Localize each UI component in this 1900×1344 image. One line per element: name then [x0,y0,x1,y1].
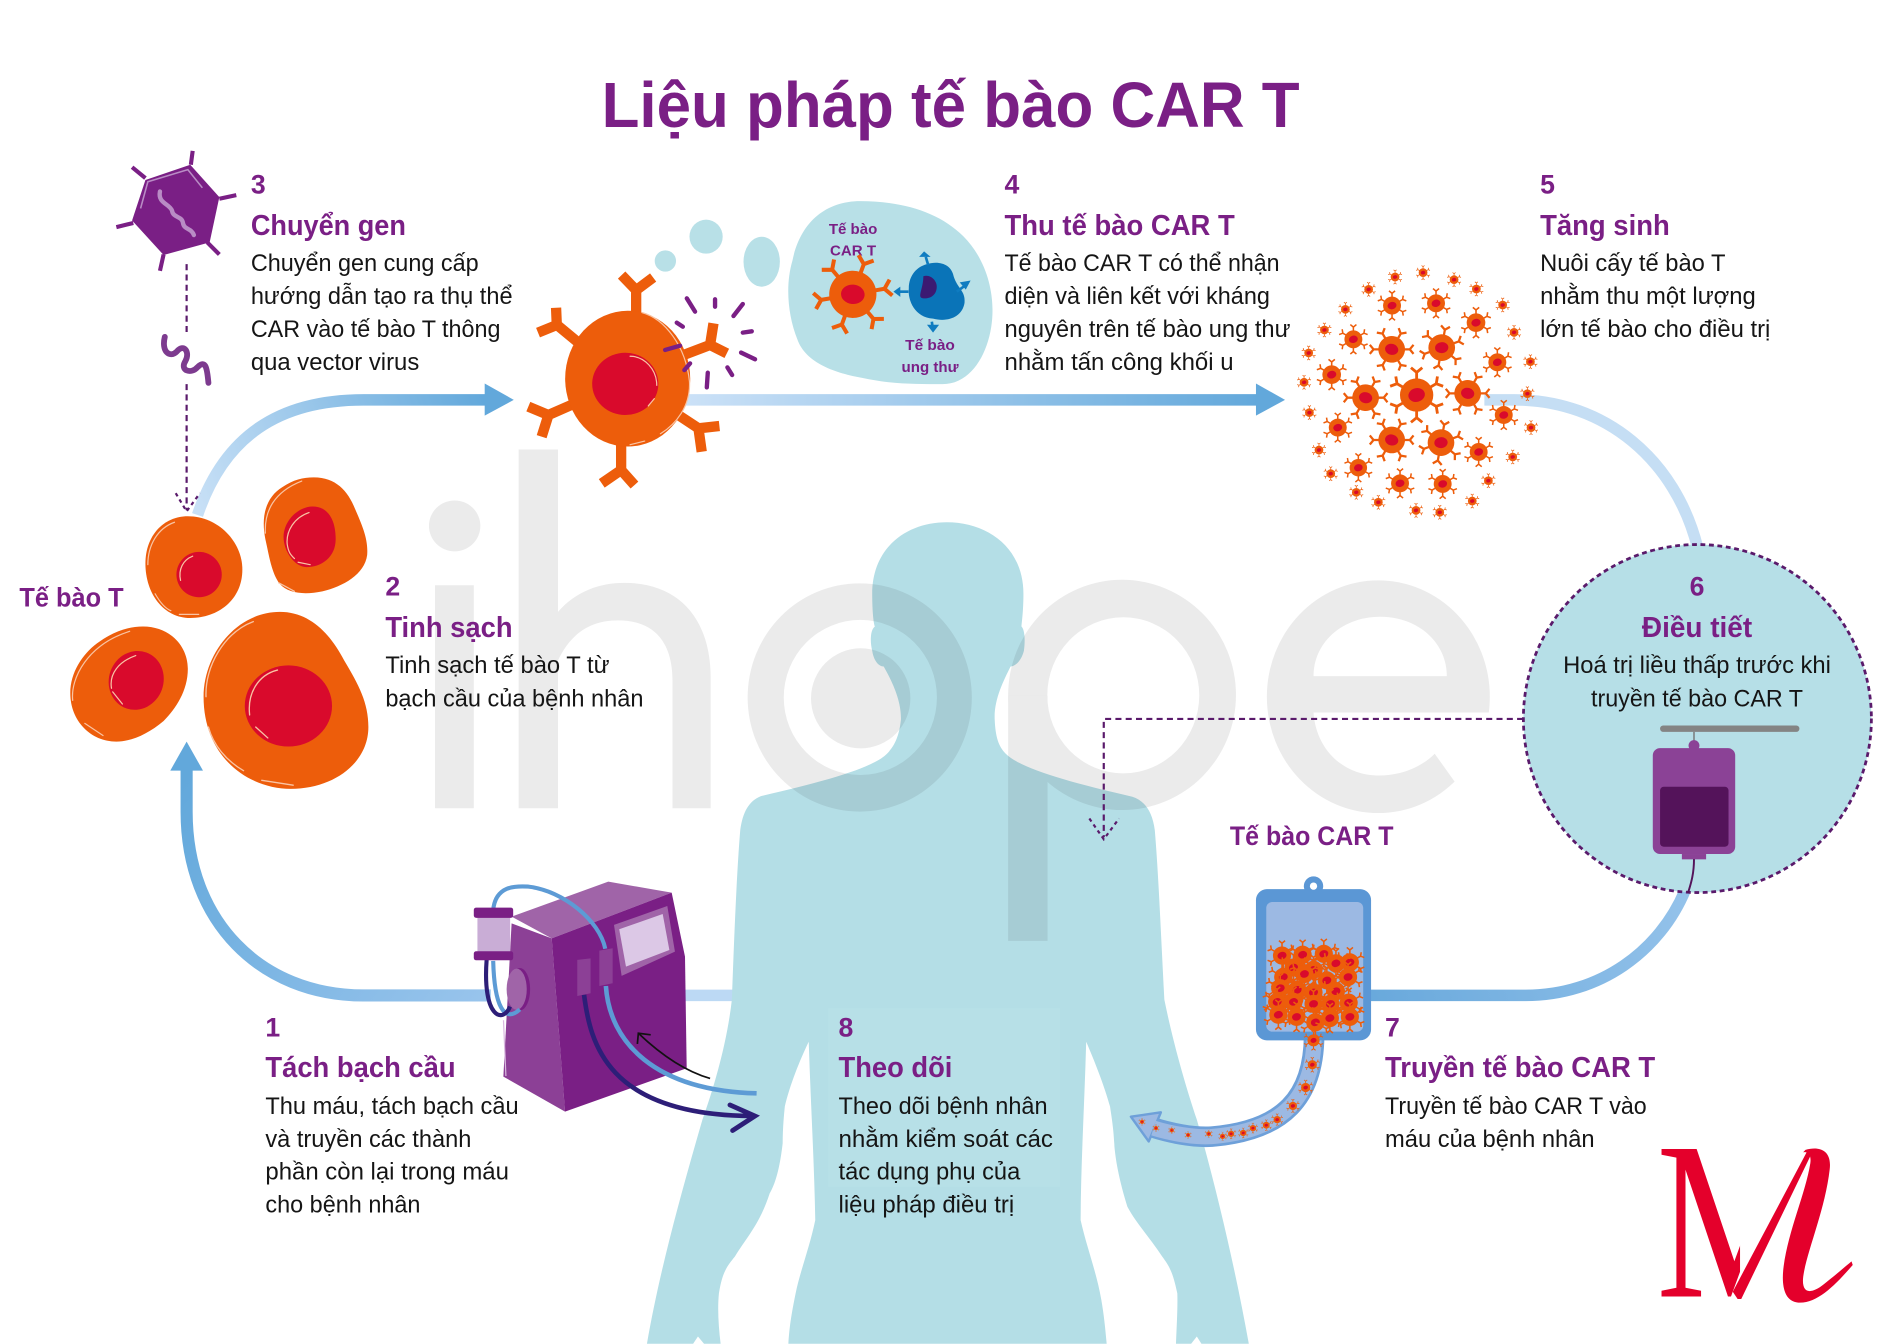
step 5 text: nhằm thu một lượng [1540,283,1756,310]
T cell bottom left [70,626,188,742]
logo: M mark [1662,1148,1853,1303]
label: cancer cell: ung thư [902,360,959,376]
step 7 text: Truyền tế bào CAR T [1385,1052,1656,1084]
step 7 text: máu của bệnh nhân [1385,1127,1595,1153]
step 1 text: Thu máu, tách bạch cầu [265,1094,519,1120]
panel: CAR T binding cancer cell [788,201,993,384]
step 6 text: Hoá trị liều thấp trước khi [1563,653,1831,679]
step 4 text: nguyên trên tế bào ung thư [1005,317,1291,343]
step 3 text: CAR vào tế bào T thông [251,317,500,343]
machine screen [614,906,675,976]
label: CAR T cell: Tế bào [829,222,877,238]
label: cancer cell [902,338,959,376]
arrow: CAR T cell to expansion [685,384,1285,416]
step 5 text: Tăng sinh [1540,210,1670,242]
label: CAR T cells: Tế bào CAR T [1230,821,1393,851]
cells in bag [1263,939,1364,1037]
T cell top right [264,477,367,593]
step 4 text: nhằm tấn công khối u [1005,349,1234,376]
T cell bottom right [204,612,368,789]
step 7 text: 7 [1385,1013,1400,1043]
step 2 text: bạch cầu của bệnh nhân [385,686,643,712]
step 5 text: lớn tế bào cho điều trị [1540,317,1770,343]
icon: virus vector [116,151,236,271]
ihope watermark [429,450,1498,941]
dashed arrow: conditioning to body [1089,719,1523,839]
step 8 text: tác dụng phụ của [839,1160,1021,1186]
logo: M mark: M [1656,1096,1814,1344]
step 8 text: nhằm kiểm soát các [839,1126,1053,1153]
step 4 text: 4 [1005,169,1020,199]
step 6 text [1563,572,1831,712]
step 8 text [839,1013,1053,1218]
cancer cell [893,251,971,333]
arrow: conditioning to infusion [1369,889,1686,995]
step 3 text [251,169,513,376]
step 2 text [385,572,643,712]
step 3 text: hướng dẫn tạo ra thụ thể [251,283,513,310]
step 8 text: liệu pháp điều trị [839,1192,1014,1218]
dashed arrow: gene transfer [176,264,200,511]
step 4 text: diện và liên kết với kháng [1005,284,1270,310]
infusion tube [1131,1036,1314,1141]
step 2 text: Tinh sạch [385,612,513,644]
icon: gene squiggle [164,337,208,383]
blood tubes [486,886,757,1131]
panel: step 6 conditioning circle [1523,545,1871,893]
step 3 text: 3 [251,169,266,199]
step 7 text [1385,1013,1656,1153]
step 1 text: 1 [265,1013,280,1043]
large CAR T cell [528,275,755,485]
arrow: expansion to conditioning [1484,400,1698,548]
step 8 text: Theo dõi bệnh nhân [839,1094,1048,1120]
T cells group [70,477,368,789]
step 4 text: Tế bào CAR T có thể nhận [1005,251,1280,277]
step 5 text: 5 [1540,169,1555,199]
step 3 text: qua vector virus [251,350,419,376]
step 2 text: Tinh sạch tế bào T từ [385,653,610,679]
expanded CAR T cell cluster [1297,265,1538,519]
step 3 text: Chuyển gen [251,210,406,242]
icon: chemotherapy drip bag [1653,725,1799,893]
thought bubbles [655,220,780,287]
step 2 text: 2 [385,572,400,602]
step 6 text: truyền tế bào CAR T [1591,686,1803,712]
arrow: T cells to CAR T cell [198,384,514,515]
step 1 text: phần còn lại trong máu [265,1160,509,1186]
step 1 text [265,1013,519,1218]
activation marks [665,298,755,387]
arrow: patient to T cells via leukapheresis [170,742,739,995]
label: T cell: Tế bào T [19,582,124,612]
panel: monitoring text background [828,1008,1060,1187]
step 4 text: Thu tế bào CAR T [1005,210,1235,242]
icon: leukapheresis machine [474,882,757,1131]
label: cancer cell: Tế bào [905,338,955,354]
cells in tube [1139,1030,1323,1141]
step 6 text: 6 [1690,572,1704,602]
icon: CAR T infusion bag [1131,876,1371,1141]
step 6 text: Điều tiết [1642,612,1753,644]
step 8 text: Theo dõi [839,1052,952,1084]
label: CAR T cell [829,222,877,260]
step 7 text: Truyền tế bào CAR T vào [1385,1094,1647,1120]
title: Liệu pháp tế bào CAR T [602,69,1300,141]
step 3 text: Chuyển gen cung cấp [251,251,479,277]
step 1 text: cho bệnh nhân [265,1192,420,1218]
patient body silhouette [647,522,1249,1344]
collection cylinder [474,908,513,960]
step 8 text: 8 [839,1013,853,1043]
step 5 text [1540,169,1770,343]
step 4 text [1005,169,1291,376]
label: CAR T cell: CAR T [830,244,876,260]
mini CAR T cell [804,245,901,344]
step 1 text: Tách bạch cầu [265,1052,456,1084]
step 1 text: và truyền các thành [265,1127,471,1153]
step 5 text: Nuôi cấy tế bào T [1540,251,1725,277]
T cell top [145,516,242,618]
